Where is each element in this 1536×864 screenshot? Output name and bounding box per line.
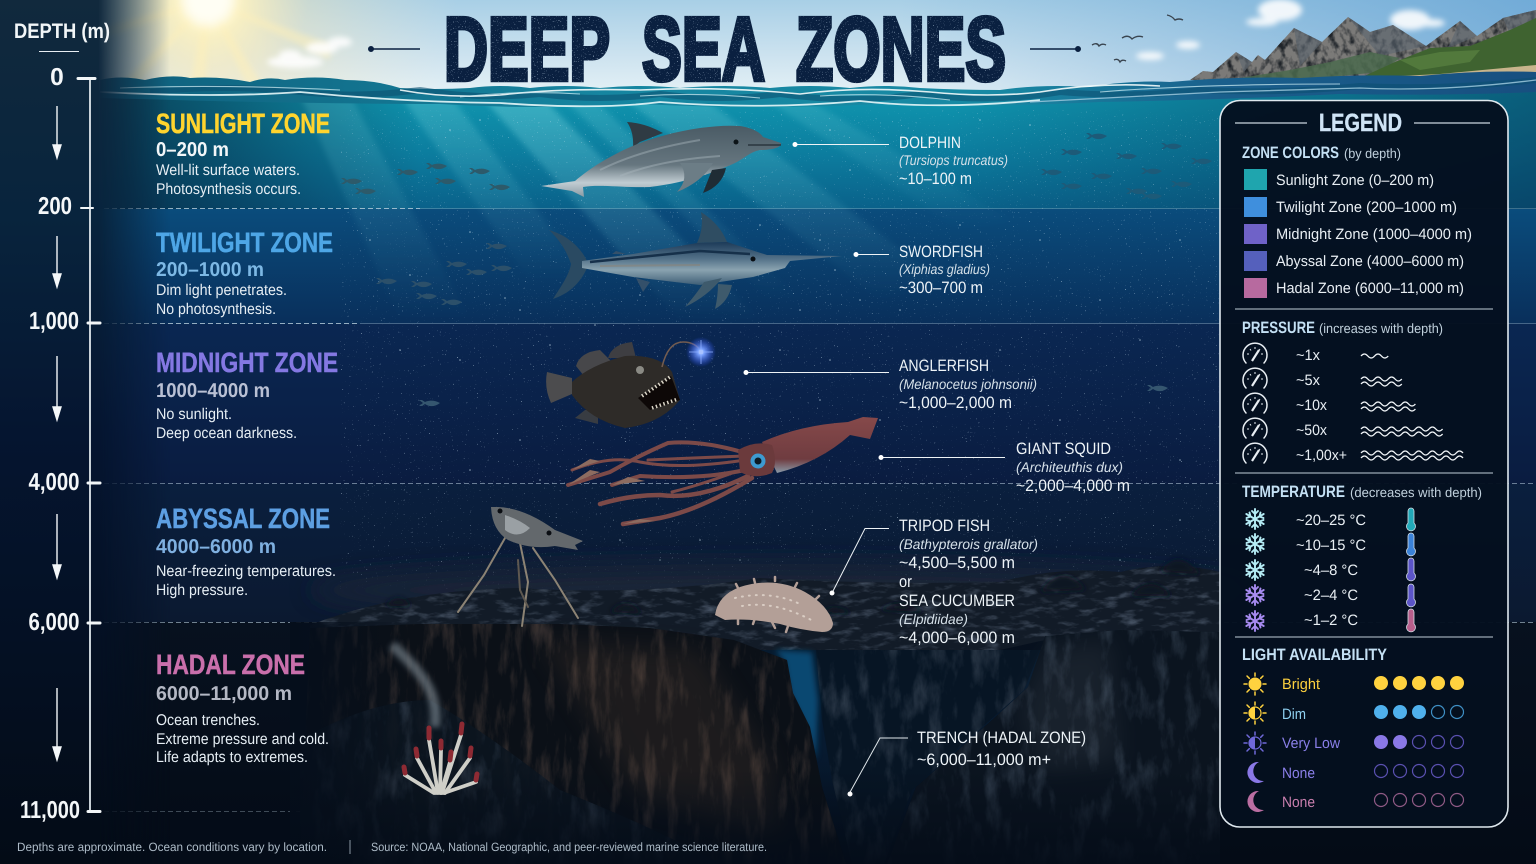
zone text: hadal: 6000–11,000 m xyxy=(156,683,292,705)
footer note: Depths are approximate. Ocean conditions vary by location. xyxy=(17,840,327,854)
legend: temperature: TEMPERATURE xyxy=(1242,483,1345,501)
zone text: sunlight xyxy=(156,108,330,198)
zone text: sunlight: Well-lit surface waters. xyxy=(156,162,300,179)
zone text: abyssal: Near-freezing temperatures. xyxy=(156,563,336,580)
legend: light availability: None xyxy=(1282,794,1315,811)
legend: zone colors xyxy=(1242,144,1472,298)
legend: temperature xyxy=(1242,483,1482,632)
callout: swordfish xyxy=(854,243,990,297)
callout: swordfish: SWORDFISH xyxy=(899,243,983,261)
hydrothermal vent smoke xyxy=(392,645,436,727)
anglerfish lure glow xyxy=(686,337,716,367)
cliff warm light xyxy=(540,640,780,840)
callout: tripod fish and sea cucumber xyxy=(830,517,1038,647)
zone text: hadal: HADAL ZONE xyxy=(156,649,305,680)
depth heading: DEPTH (m) xyxy=(14,20,110,43)
trench far wall xyxy=(816,650,1040,864)
legend: zone colors: Midnight Zone (1000–4000 m) xyxy=(1276,226,1472,243)
zone text: hadal: Extreme pressure and cold. xyxy=(156,731,329,748)
callout: tripod fish and sea cucumber: (Elpidiidae) xyxy=(899,611,968,627)
icon: moon pink xyxy=(1247,791,1264,812)
legend: zone colors: Hadal Zone (6000–11,000 m) xyxy=(1276,280,1464,297)
left wall lower shelf xyxy=(300,700,720,864)
callout: dolphin xyxy=(792,134,1008,188)
callout: dolphin: (Tursiops truncatus) xyxy=(899,152,1008,168)
creature: giant squid xyxy=(568,417,878,524)
icon: moon purple xyxy=(1247,762,1264,783)
zone text: twilight: No photosynthesis. xyxy=(156,301,276,318)
legend: light availability: LIGHT AVAILABILITY xyxy=(1242,646,1387,664)
title rule right xyxy=(1030,46,1080,52)
callout: tripod fish and sea cucumber: TRIPOD FISH xyxy=(899,517,990,535)
depth axis: 11,000 xyxy=(20,797,80,824)
zone text: twilight: 200–1000 m xyxy=(156,259,264,281)
rock fade to left xyxy=(290,622,410,864)
legend: light availability: Dim xyxy=(1282,706,1306,723)
legend: zone colors: ZONE COLORS xyxy=(1242,144,1339,162)
callout: tripod fish and sea cucumber: or xyxy=(899,573,912,591)
zone text: hadal: Ocean trenches. xyxy=(156,712,260,729)
legend heading: LEGEND xyxy=(1319,109,1402,137)
callout: anglerfish: (Melanocetus johnsonii) xyxy=(899,376,1037,392)
mountains xyxy=(1190,10,1536,82)
title: DEEP xyxy=(444,0,610,100)
legend: zone colors: Twilight Zone (200–1000 m) xyxy=(1276,199,1457,216)
zone text: sunlight: SUNLIGHT ZONE xyxy=(156,108,330,139)
callout: tripod fish and sea cucumber: (Bathypterois grallator) xyxy=(899,536,1038,552)
legend: pressure: ~1,00x+ xyxy=(1296,447,1347,464)
depth axis: 4,000 xyxy=(28,469,80,496)
depth axis: 200 xyxy=(38,193,72,220)
callout: trench: TRENCH (HADAL ZONE) xyxy=(917,729,1086,747)
creature: swordfish xyxy=(549,212,842,309)
callout: giant squid xyxy=(878,440,1130,495)
legend: temperature: ~1–2 °C xyxy=(1304,612,1358,629)
birds xyxy=(1092,15,1183,62)
panel: legend xyxy=(1220,100,1508,827)
legend: pressure: (increases with depth) xyxy=(1319,321,1443,336)
trench blue light xyxy=(775,650,818,760)
callout: swordfish: (Xiphias gladius) xyxy=(899,261,990,277)
depth axis: 6,000 xyxy=(28,609,80,636)
legend: pressure xyxy=(1242,319,1463,464)
title rule left xyxy=(368,46,420,52)
callout: anglerfish xyxy=(744,357,1037,412)
callout: giant squid: ~2,000–4,000 m xyxy=(1016,477,1130,495)
title: SEA xyxy=(642,0,765,100)
zone text: midnight: No sunlight. xyxy=(156,406,232,423)
legend: temperature: ~4–8 °C xyxy=(1304,562,1358,579)
light rays xyxy=(300,95,1010,320)
zone boundary lines xyxy=(104,208,1536,812)
legend: zone colors: Abyssal Zone (4000–6000 m) xyxy=(1276,253,1464,270)
legend: light availability xyxy=(1242,646,1464,812)
callout: swordfish: ~300–700 m xyxy=(899,279,983,297)
creature: tripod fish xyxy=(458,507,583,626)
callout: tripod fish and sea cucumber: ~4,500–5,500 m xyxy=(899,554,1015,572)
legend: light availability: Bright xyxy=(1282,676,1321,693)
zone text: sunlight: 0–200 m xyxy=(156,139,229,161)
legend: light availability: Very Low xyxy=(1282,735,1340,752)
depth axis: 0 xyxy=(50,64,64,91)
callout: giant squid: GIANT SQUID xyxy=(1016,440,1111,458)
icon: dim sun xyxy=(1244,702,1266,724)
callout: giant squid: (Architeuthis dux) xyxy=(1016,459,1123,475)
creature: sea cucumber xyxy=(715,577,833,632)
zone text: midnight: 1000–4000 m xyxy=(156,380,270,402)
footer note xyxy=(17,840,767,854)
callout: dolphin: DOLPHIN xyxy=(899,134,961,152)
zone text: twilight: TWILIGHT ZONE xyxy=(156,227,333,258)
right trench wall xyxy=(887,630,1220,864)
zone text: abyssal: High pressure. xyxy=(156,582,248,599)
zone text: midnight: Deep ocean darkness. xyxy=(156,425,297,442)
callout: anglerfish: ANGLERFISH xyxy=(899,357,989,375)
callout: anglerfish: ~1,000–2,000 m xyxy=(899,394,1012,412)
sky background xyxy=(0,0,1536,100)
seabed haze xyxy=(310,564,1250,616)
legend: temperature: (decreases with depth) xyxy=(1350,485,1482,500)
depth axis xyxy=(14,20,110,824)
legend: light availability: None xyxy=(1282,765,1315,782)
icon: very low sun xyxy=(1244,732,1266,754)
creature: dolphin xyxy=(541,122,781,197)
callout: trench: ~6,000–11,000 m+ xyxy=(917,751,1051,769)
legend: pressure: ~10x xyxy=(1296,397,1327,414)
water surface waves xyxy=(100,72,1536,107)
left trench wall xyxy=(300,624,846,864)
tube worms xyxy=(404,724,477,793)
seabed plain xyxy=(310,566,1220,650)
depth axis: 1,000 xyxy=(29,308,79,335)
seabed mounds xyxy=(385,559,1200,614)
title xyxy=(444,0,1006,100)
creature: anglerfish xyxy=(546,342,701,428)
right wall lit rock xyxy=(1020,640,1120,770)
legend: pressure: PRESSURE xyxy=(1242,319,1315,337)
clouds xyxy=(267,0,1445,68)
icon: bright sun xyxy=(1244,673,1266,695)
zone text: hadal xyxy=(156,649,329,766)
marine snow particles xyxy=(340,110,1220,590)
callout: dolphin: ~10–100 m xyxy=(899,170,972,188)
callout: trench xyxy=(848,729,1086,796)
legend: temperature: ~20–25 °C xyxy=(1296,512,1366,529)
zone text: hadal: Life adapts to extremes. xyxy=(156,749,308,766)
abyssal bottom fade xyxy=(100,770,1220,864)
zone text: twilight xyxy=(156,227,333,318)
callout: tripod fish and sea cucumber: SEA CUCUMBER xyxy=(899,592,1015,610)
zone text: sunlight: Photosynthesis occurs. xyxy=(156,181,301,198)
zone text: abyssal: ABYSSAL ZONE xyxy=(156,503,330,534)
legend: zone colors: (by depth) xyxy=(1344,146,1401,161)
footer note: Source: NOAA, National Geographic, and peer-reviewed marine science literature. xyxy=(371,840,767,854)
callout: tripod fish and sea cucumber: ~4,000–6,000 m xyxy=(899,629,1015,647)
sun xyxy=(0,0,520,100)
trench interior xyxy=(760,650,1045,864)
zone text: midnight xyxy=(156,347,338,442)
legend: temperature: ~2–4 °C xyxy=(1304,587,1358,604)
zone text: midnight: MIDNIGHT ZONE xyxy=(156,347,338,378)
school of small fish xyxy=(341,133,1212,406)
depth arrows xyxy=(53,106,61,760)
legend: pressure: ~50x xyxy=(1296,422,1327,439)
legend: pressure: ~1x xyxy=(1296,347,1320,364)
zone text: abyssal: 4000–6000 m xyxy=(156,536,276,558)
legend: pressure: ~5x xyxy=(1296,372,1320,389)
title: ZONES xyxy=(796,0,1006,100)
legend: zone colors: Sunlight Zone (0–200 m) xyxy=(1276,172,1434,189)
legend: temperature: ~10–15 °C xyxy=(1296,537,1366,554)
left depth column xyxy=(0,0,170,864)
zone text: abyssal xyxy=(156,503,336,599)
zone text: twilight: Dim light penetrates. xyxy=(156,282,287,299)
